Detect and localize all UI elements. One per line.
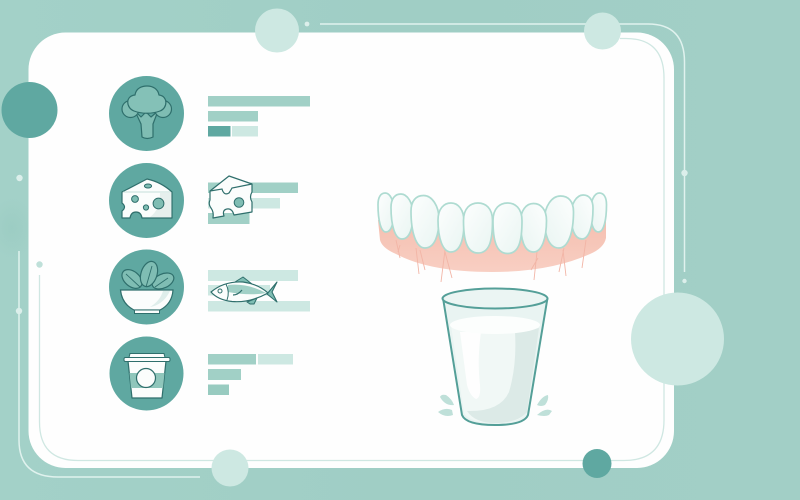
bars: cheese row xyxy=(208,182,298,224)
decorative circle: large right xyxy=(631,292,724,386)
background soft blob xyxy=(0,198,34,258)
icon: loose cheese wedge xyxy=(209,176,252,218)
icon: fish xyxy=(211,277,277,304)
outer frame lines xyxy=(19,24,684,477)
gums xyxy=(378,220,606,272)
milk splashes xyxy=(438,395,552,416)
icon: takeaway cup xyxy=(110,336,184,410)
bars: salad row xyxy=(208,270,310,312)
inner frame line xyxy=(40,38,664,460)
milk surface xyxy=(450,316,540,334)
inner frame dot xyxy=(36,261,43,268)
decorative circle: top right xyxy=(584,12,621,50)
illustration: teeth and gums xyxy=(378,193,606,282)
decorative circle: bottom left xyxy=(212,450,248,486)
decorative circle: top left xyxy=(255,8,299,52)
glass outline xyxy=(442,288,548,425)
milk xyxy=(451,325,539,423)
bars: cup row xyxy=(208,354,293,395)
illustration: glass of milk xyxy=(438,288,552,425)
white card xyxy=(28,32,674,468)
decorative circle: left teal xyxy=(2,82,58,138)
icon: cheese xyxy=(109,163,184,238)
decorative circle: bottom right teal xyxy=(582,449,612,478)
milk highlight xyxy=(460,332,481,399)
bars: broccoli row xyxy=(208,96,310,136)
outer frame dots xyxy=(16,22,688,314)
gum veins xyxy=(396,240,586,282)
icon: salad bowl xyxy=(109,250,184,324)
glass body xyxy=(443,298,548,425)
icon: broccoli xyxy=(109,76,184,151)
teeth xyxy=(378,193,606,254)
milk shade xyxy=(467,328,539,423)
